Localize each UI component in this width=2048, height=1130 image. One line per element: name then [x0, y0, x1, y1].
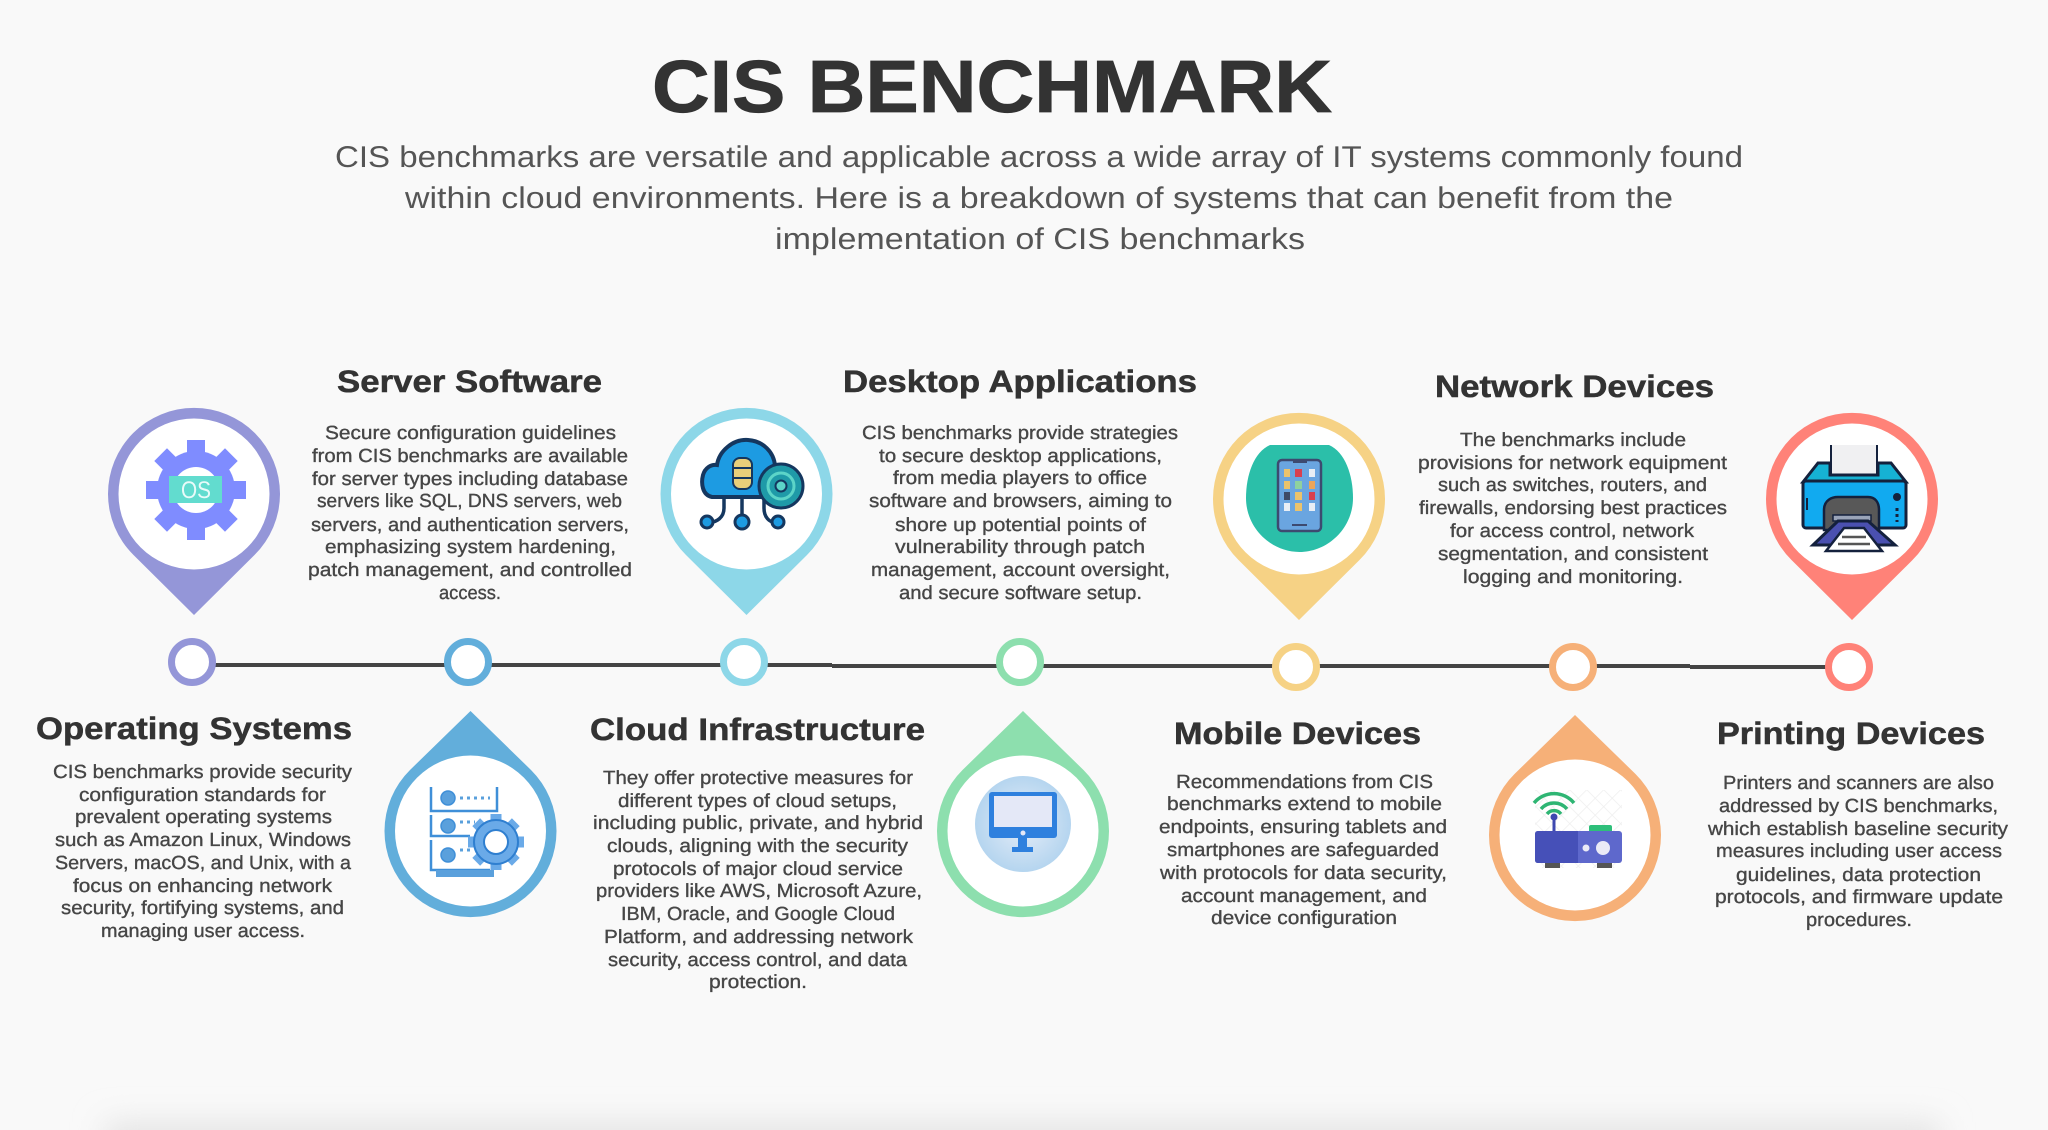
text block: operating systems: [53, 762, 353, 942]
subtitle text block: implementation of CIS benchmarks: [775, 223, 1305, 256]
text block: cloud infrastructure: security, access control, and data: [608, 950, 907, 971]
text block: desktop applications: [862, 423, 1178, 604]
icon: OS gear: [146, 440, 246, 540]
timeline marker: server software: [448, 642, 488, 682]
text block: printing devices: which establish baseline security: [1707, 819, 2009, 840]
title: CIS BENCHMARK: [652, 45, 1332, 128]
timeline marker: cloud infrastructure: [724, 642, 764, 682]
text block: network devices: provisions for network equipment: [1418, 453, 1728, 474]
heading: mobile devices: Mobile Devices: [1174, 716, 1421, 751]
text block: cloud infrastructure: Platform, and addressing network: [604, 927, 914, 948]
text block: cloud infrastructure: including public, private, and hybrid: [593, 813, 923, 834]
text block: cloud infrastructure: different types of cloud setups,: [618, 791, 897, 812]
text block: cloud infrastructure: clouds, aligning with the security: [607, 836, 909, 857]
text block: operating systems: CIS benchmarks provide security: [53, 762, 353, 783]
text block: mobile devices: endpoints, ensuring tablets and: [1159, 817, 1447, 838]
timeline marker: operating systems: [172, 642, 212, 682]
pin: operating systems: [108, 408, 280, 615]
icon: server rack with gear: [431, 787, 524, 877]
text block: mobile devices: Recommendations from CIS: [1176, 772, 1433, 793]
text block: network devices: for access control, network: [1450, 521, 1695, 542]
heading: cloud infrastructure: Cloud Infrastructure: [590, 712, 925, 747]
text block: desktop applications: management, account oversight,: [871, 560, 1170, 581]
icon: smartphone: [1246, 445, 1353, 552]
timeline marker: desktop applications: [1000, 642, 1040, 682]
heading: printing devices: Printing Devices: [1717, 716, 1985, 751]
timeline marker: network devices: [1552, 646, 1594, 688]
pin: desktop applications: [937, 711, 1109, 917]
pin: network devices: [1489, 715, 1661, 921]
text block: operating systems: security, fortifying systems, and: [61, 898, 344, 919]
text block: printing devices: measures including user access: [1716, 841, 2002, 862]
text block: network devices: segmentation, and consistent: [1438, 544, 1709, 565]
pin: cloud infrastructure: [660, 408, 832, 615]
text block: server software: Secure configuration guidelines: [325, 423, 616, 444]
text block: server software: access.: [439, 583, 501, 604]
pin: server software: [384, 711, 556, 917]
text block: mobile devices: with protocols for data security,: [1159, 863, 1447, 884]
timeline marker: mobile devices: [1276, 646, 1316, 688]
text block: network devices: [1418, 430, 1728, 588]
text block: server software: [308, 423, 632, 604]
text block: mobile devices: benchmarks extend to mobile: [1167, 794, 1442, 815]
text block: operating systems: Servers, macOS, and Unix, with a: [55, 853, 351, 874]
icon: cloud with database and gear: [701, 440, 803, 529]
text block: cloud infrastructure: providers like AWS, Microsoft Azure,: [596, 881, 922, 902]
text block: operating systems: focus on enhancing network: [73, 876, 333, 897]
pin: printing devices: [1766, 413, 1938, 620]
text block: cloud infrastructure: protocols of major cloud service: [613, 859, 903, 880]
heading: server software: Server Software: [337, 364, 602, 399]
text block: desktop applications: shore up potential points of: [895, 515, 1147, 536]
icon: wifi router: [1534, 790, 1622, 868]
text block: desktop applications: from media players to office: [893, 468, 1147, 489]
text block: network devices: firewalls, endorsing best practices: [1419, 498, 1727, 519]
subtitle text block: within cloud environments. Here is a breakdown of systems that can benefit from the: [404, 182, 1673, 215]
icon: monitor: [975, 776, 1071, 872]
text block: printing devices: procedures.: [1806, 910, 1912, 931]
text block: printing devices: [1707, 773, 2009, 931]
text block: server software: from CIS benchmarks are available: [312, 446, 628, 467]
timeline marker: printing devices: [1828, 646, 1870, 688]
text block: operating systems: prevalent operating systems: [75, 807, 332, 828]
text block: mobile devices: [1159, 772, 1447, 929]
pin: mobile devices: [1213, 413, 1385, 620]
text block: desktop applications: and secure software setup.: [899, 583, 1142, 604]
text block: server software: patch management, and controlled: [308, 560, 632, 581]
text block: desktop applications: software and browsers, aiming to: [869, 491, 1172, 512]
text block: network devices: The benchmarks include: [1460, 430, 1686, 451]
heading: network devices: Network Devices: [1435, 369, 1714, 404]
text block: desktop applications: to secure desktop applications,: [879, 446, 1162, 467]
subtitle text block: [335, 141, 1743, 256]
text block: cloud infrastructure: [593, 768, 923, 993]
icon: printer: [1803, 445, 1906, 551]
heading: operating systems: Operating Systems: [36, 711, 352, 746]
text block: mobile devices: account management, and: [1181, 886, 1427, 907]
subtitle text block: CIS benchmarks are versatile and applicable across a wide array of IT systems commonly found: [335, 141, 1743, 174]
text block: operating systems: managing user access.: [101, 921, 305, 942]
text block: network devices: such as switches, routers, and: [1438, 475, 1707, 496]
text block: operating systems: configuration standards for: [79, 785, 327, 806]
text block: cloud infrastructure: IBM, Oracle, and Google Cloud: [621, 904, 895, 925]
text block: operating systems: such as Amazon Linux, Windows: [55, 830, 351, 851]
text block: cloud infrastructure: They offer protective measures for: [603, 768, 914, 789]
text block: mobile devices: smartphones are safeguarded: [1167, 840, 1439, 861]
text block: server software: emphasizing system hardening,: [325, 537, 616, 558]
text block: desktop applications: vulnerability through patch: [895, 537, 1145, 558]
timeline line: [192, 665, 1849, 667]
text block: network devices: logging and monitoring.: [1463, 567, 1683, 588]
text block: cloud infrastructure: protection.: [709, 972, 807, 993]
icon: OS gear: OS: [181, 477, 211, 504]
text block: printing devices: Printers and scanners are also: [1723, 773, 1994, 794]
text block: server software: servers, and authentication servers,: [311, 515, 629, 536]
heading: desktop applications: Desktop Applications: [843, 364, 1197, 399]
text block: printing devices: addressed by CIS benchmarks,: [1719, 796, 1998, 817]
text block: server software: servers like SQL, DNS servers, web: [317, 491, 622, 512]
text block: desktop applications: CIS benchmarks provide strategies: [862, 423, 1178, 444]
text block: printing devices: protocols, and firmware update: [1715, 887, 2003, 908]
text block: mobile devices: device configuration: [1211, 908, 1397, 929]
text block: printing devices: guidelines, data protection: [1736, 865, 1981, 886]
text block: server software: for server types including database: [312, 469, 628, 490]
